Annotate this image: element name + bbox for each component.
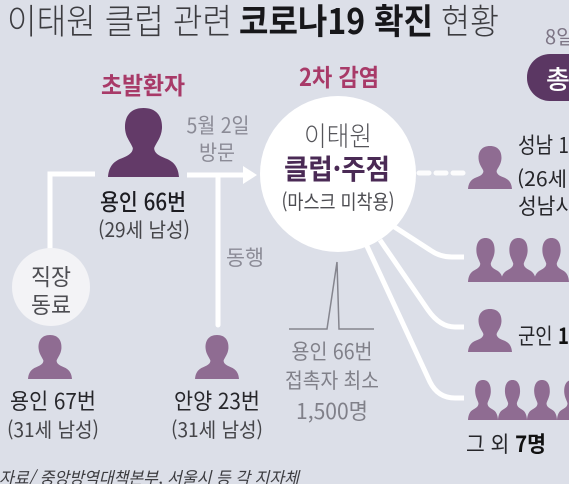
text: contacts of Yongin 66: 1,500명	[296, 394, 368, 426]
connector: coworker line	[50, 174, 95, 250]
label: visit on May 2	[186, 110, 250, 167]
title	[7, 0, 499, 45]
connector: club to group	[393, 226, 464, 257]
panel: Itaewon club circle: 이태원	[304, 115, 372, 154]
text: Seongnam: (26세	[517, 163, 567, 192]
text: Yongin 67	[7, 384, 99, 443]
text: contacts of Yongin 66: 용인 66번	[292, 336, 372, 366]
arrow: visit to club	[187, 166, 257, 184]
icon: soldier	[468, 309, 512, 352]
panel: Itaewon club circle: 클럽·주점	[284, 148, 390, 188]
panel: Itaewon club circle	[260, 96, 416, 252]
panel: coworker circle	[12, 248, 90, 326]
text: Yongin 66: 용인 66번	[100, 183, 186, 217]
icon: first patient	[108, 108, 179, 177]
label: visit on May 2: 5월 2일	[186, 110, 250, 140]
text: Yongin 67: (31세 남성)	[7, 414, 99, 443]
badge: total	[527, 54, 569, 101]
text: contacts of Yongin 66: 접촉자 최소	[285, 365, 379, 395]
icon: Yongin 67	[28, 335, 72, 379]
icon: Seongnam	[468, 146, 512, 189]
label: accompanied: 동행	[226, 242, 264, 272]
connector: club to soldier	[380, 240, 464, 327]
panel: Itaewon club circle: (마스크 미착용)	[282, 186, 394, 215]
label: first patient: 초발환자	[101, 66, 185, 101]
icon: Anyang 23	[195, 335, 239, 379]
text: Yongin 67: 용인 67번	[10, 384, 96, 416]
text: Yongin 66	[98, 183, 190, 243]
icons: group row	[468, 238, 569, 282]
text: contacts of Yongin 66	[285, 336, 379, 426]
panel: coworker circle: 직장	[31, 258, 71, 292]
text: others: 그 외 7명	[466, 427, 546, 459]
label: visit on May 2: 방문	[199, 137, 235, 167]
connector: accompanied line	[216, 177, 220, 325]
panel: coworker circle: 동료	[31, 286, 71, 320]
text: Anyang 23: 안양 23번	[174, 384, 260, 416]
text: Anyang 23	[171, 384, 263, 443]
label: secondary infection: 2차 감염	[299, 58, 379, 93]
text: Anyang 23: (31세 남성)	[171, 414, 263, 443]
text: Yongin 66: (29세 남성)	[98, 214, 190, 243]
icons: others row	[468, 380, 569, 420]
connector: club to others	[366, 244, 464, 398]
chart: contact spike	[289, 262, 374, 329]
text: Seongnam	[517, 128, 569, 221]
connector: dashed line to Seongnam	[419, 170, 465, 176]
